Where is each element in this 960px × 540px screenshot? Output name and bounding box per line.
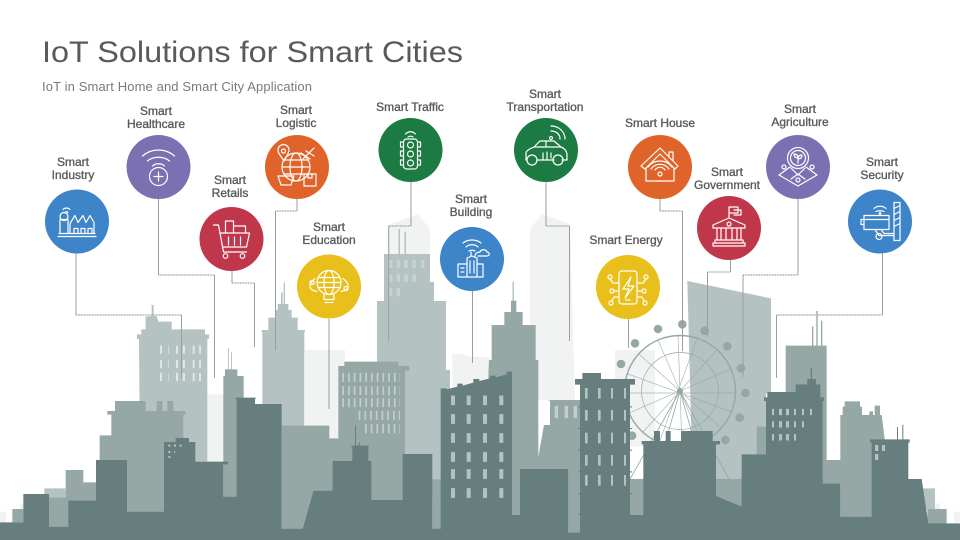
node: Smart Education: Smart <box>313 220 346 234</box>
tower window details <box>160 264 424 377</box>
title: IoT Solutions for Smart Cities <box>42 36 463 69</box>
node: Smart Healthcare: Smart <box>140 104 173 118</box>
node: Smart Education <box>297 220 361 318</box>
node: Smart Industry: Smart <box>57 155 90 169</box>
connector lines <box>76 182 882 409</box>
light towers <box>44 229 935 509</box>
mid-tone buildings <box>12 282 947 533</box>
node: Smart Security: Smart <box>866 155 899 169</box>
node: Smart Agriculture: Smart <box>784 102 817 116</box>
node: Smart Healthcare: Healthcare <box>127 117 185 131</box>
node: Smart Transportation <box>507 87 583 182</box>
mid-tone foreground band <box>630 479 742 520</box>
node: Smart Agriculture <box>766 102 830 199</box>
node: Smart Transportation: Transportation <box>507 100 583 114</box>
node: Smart Building: Building <box>450 205 492 219</box>
node: Smart House <box>625 116 695 199</box>
node: Smart Traffic: Smart Traffic <box>376 100 444 114</box>
node: Smart Energy <box>589 233 663 319</box>
city skyline illustration <box>0 214 960 540</box>
faint background buildings <box>0 214 960 522</box>
node: Smart Security <box>848 155 912 254</box>
node: Smart Security: Security <box>860 168 904 182</box>
node: Smart Logistic: Logistic <box>276 116 316 130</box>
node: Smart Industry <box>45 155 109 254</box>
mid-tone building windows <box>342 377 577 429</box>
node: Smart Retails: Smart <box>214 173 247 187</box>
node: Smart Industry: Industry <box>52 168 94 182</box>
node: Smart Retails <box>200 173 264 271</box>
node: Smart Building: Smart <box>455 192 488 206</box>
node: Smart Retails: Retails <box>212 186 248 200</box>
node: Smart Logistic: Smart <box>280 103 313 117</box>
node: Smart Traffic <box>376 100 444 182</box>
dark building windows <box>168 393 885 493</box>
node: Smart Logistic <box>265 103 329 199</box>
node: Smart Energy: Smart Energy <box>589 233 663 247</box>
node: Smart Education: Education <box>302 233 356 247</box>
node: Smart Government: Smart <box>711 165 744 179</box>
node: Smart House: Smart House <box>625 116 695 130</box>
node: Smart Government: Government <box>694 178 761 192</box>
node: Smart Building <box>440 192 504 291</box>
node: Smart Government <box>694 165 761 260</box>
subtitle: IoT in Smart Home and Smart City Application <box>42 79 312 94</box>
node: Smart Agriculture: Agriculture <box>771 115 829 129</box>
node: Smart Transportation: Smart <box>529 87 562 101</box>
dark foreground silhouette <box>0 368 960 540</box>
node: Smart Healthcare <box>126 104 190 199</box>
ferris wheel <box>617 320 750 479</box>
